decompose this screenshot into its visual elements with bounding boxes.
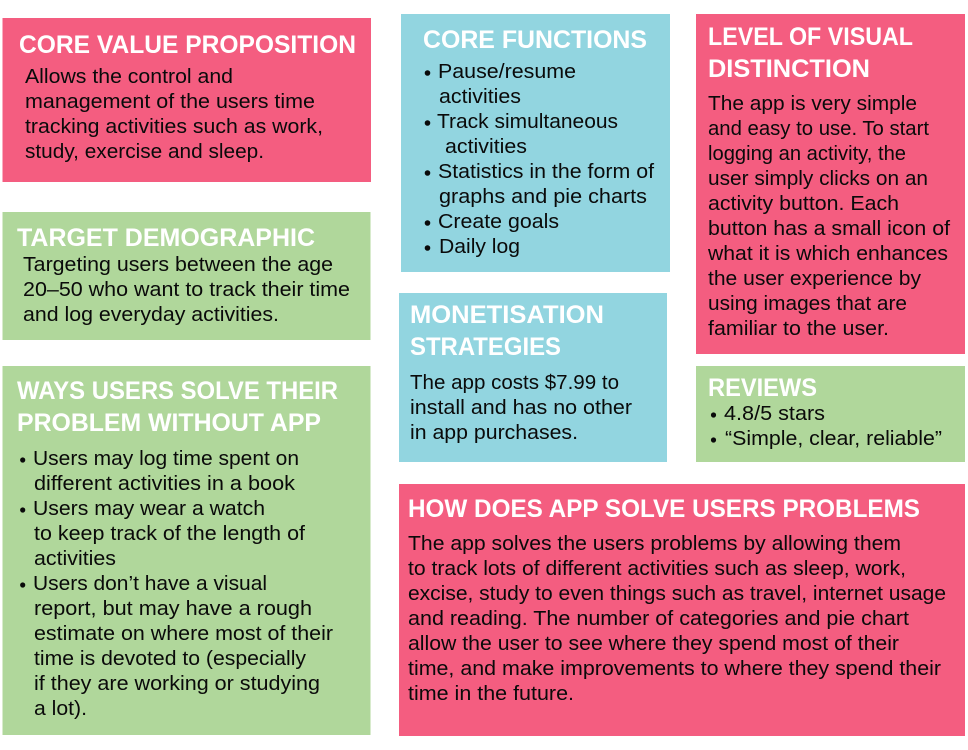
text: visual distinction description: user simply clicks on an (708, 168, 928, 190)
heading: ways users solve their problem (17, 377, 338, 437)
text: how app solves problems description: The app solves the users problems by allowing them (408, 533, 901, 555)
text: visual distinction description: what it is which enhances (707, 243, 948, 265)
heading: monetisation strategies: STRATEGIES (410, 333, 561, 361)
panel: core functions (401, 14, 670, 272)
text: how app solves problems description: time, and make improvements to where they spend their (408, 658, 941, 680)
list: ways users solve the problem: time is devoted to (especially (34, 648, 306, 670)
list: ways users solve the problem: Users don’t have a visual (33, 573, 267, 595)
text: how app solves problems description: and reading. The number of categories and pie chart (408, 608, 909, 630)
heading: core functions: CORE FUNCTIONS (423, 26, 647, 54)
heading: ways users solve their problem: PROBLEM WITHOUT APP (17, 409, 321, 437)
text: visual distinction description (707, 93, 950, 340)
text: how app solves problems description (408, 533, 946, 705)
panel: target demographic (2, 212, 370, 340)
heading: reviews: REVIEWS (708, 374, 817, 402)
text: visual distinction description: The app is very simple (708, 93, 917, 115)
heading: how does app solve users problems: HOW DOES APP SOLVE USERS PROBLEMS (408, 495, 920, 523)
heading: monetisation strategies (410, 301, 604, 361)
heading: level of visual distinction: DISTINCTION (708, 55, 870, 83)
text: target demographic description (23, 254, 350, 326)
list: ways users solve the problem: different activities in a book (34, 473, 296, 495)
list: core functions: Track simultaneous (437, 111, 618, 133)
text: monetisation description: The app costs $7.99 to (410, 372, 619, 394)
text: visual distinction description: activity button. Each (708, 193, 899, 215)
text: how app solves problems description: excise, study to even things such as travel, internet usage (408, 583, 946, 605)
list: reviews: 4.8/5 stars (724, 403, 825, 425)
text: how app solves problems description: allow the user to see where they spend most of their (408, 633, 899, 655)
panel: level of visual distinction (696, 14, 965, 354)
text: monetisation description: in app purchases. (410, 422, 578, 444)
text: target demographic description: 20–50 who want to track their time (23, 279, 350, 301)
heading: level of visual distinction (708, 23, 913, 83)
heading: target demographic: TARGET DEMOGRAPHIC (17, 224, 315, 252)
list: core functions (425, 61, 654, 258)
panel: how does app solve users problems (399, 484, 965, 736)
text: visual distinction description: and easy to use. To start (708, 118, 929, 140)
list: ways users solve the problem: estimate on where most of their (34, 623, 333, 645)
list: ways users solve the problem: report, but may have a rough (34, 598, 312, 620)
list: core functions: Statistics in the form of (438, 161, 654, 183)
list: core functions: activities (439, 86, 521, 108)
heading: ways users solve their problem: WAYS USERS SOLVE THEIR (17, 377, 338, 405)
list: core functions: activities (445, 136, 527, 158)
panel: reviews (696, 366, 965, 462)
text: visual distinction description: button has a small icon of (708, 218, 950, 240)
panel: monetisation strategies (399, 293, 667, 462)
text: core value description (25, 66, 323, 163)
list: ways users solve the problem: Users may wear a watch (33, 498, 265, 520)
text: visual distinction description: logging an activity, the (708, 143, 906, 165)
list: core functions: Create goals (438, 211, 559, 233)
list: core functions: Daily log (439, 236, 520, 258)
list: ways users solve the problem: if they are working or studying (34, 673, 320, 695)
text: core value description: tracking activities such as work, (25, 116, 323, 138)
text: monetisation description: install and has no other (410, 397, 632, 419)
text: how app solves problems description: to track lots of different activities such as sleep, work, (408, 558, 906, 580)
text: core value description: management of the users time (25, 91, 315, 113)
list: reviews (711, 403, 942, 450)
panel: ways users solve their problem without app (2, 366, 370, 735)
text: visual distinction description: the user experience by (708, 268, 921, 290)
text: target demographic description: Targeting users between the age (23, 254, 333, 276)
panel: core value proposition (2, 18, 371, 182)
list: core functions: graphs and pie charts (439, 186, 647, 208)
text: how app solves problems description: time in the future. (408, 683, 574, 705)
list: reviews: “Simple, clear, reliable” (725, 428, 942, 450)
list: core functions: Pause/resume (438, 61, 576, 83)
text: monetisation description (410, 372, 632, 444)
list: ways users solve the problem: activities (34, 548, 116, 570)
list: ways users solve the problem: Users may log time spent on (33, 448, 299, 470)
text: target demographic description: and log everyday activities. (23, 304, 279, 326)
text: visual distinction description: familiar to the user. (708, 318, 889, 340)
list: ways users solve the problem: to keep track of the length of (34, 523, 305, 545)
heading: monetisation strategies: MONETISATION (410, 301, 604, 329)
list: ways users solve the problem (20, 448, 333, 720)
heading: level of visual distinction: LEVEL OF VISUAL (708, 23, 913, 51)
list: ways users solve the problem: a lot). (34, 698, 87, 720)
text: core value description: study, exercise and sleep. (25, 141, 264, 163)
text: visual distinction description: using images that are (708, 293, 907, 315)
text: core value description: Allows the control and (25, 66, 233, 88)
heading: core value proposition: CORE VALUE PROPOSITION (19, 31, 356, 59)
